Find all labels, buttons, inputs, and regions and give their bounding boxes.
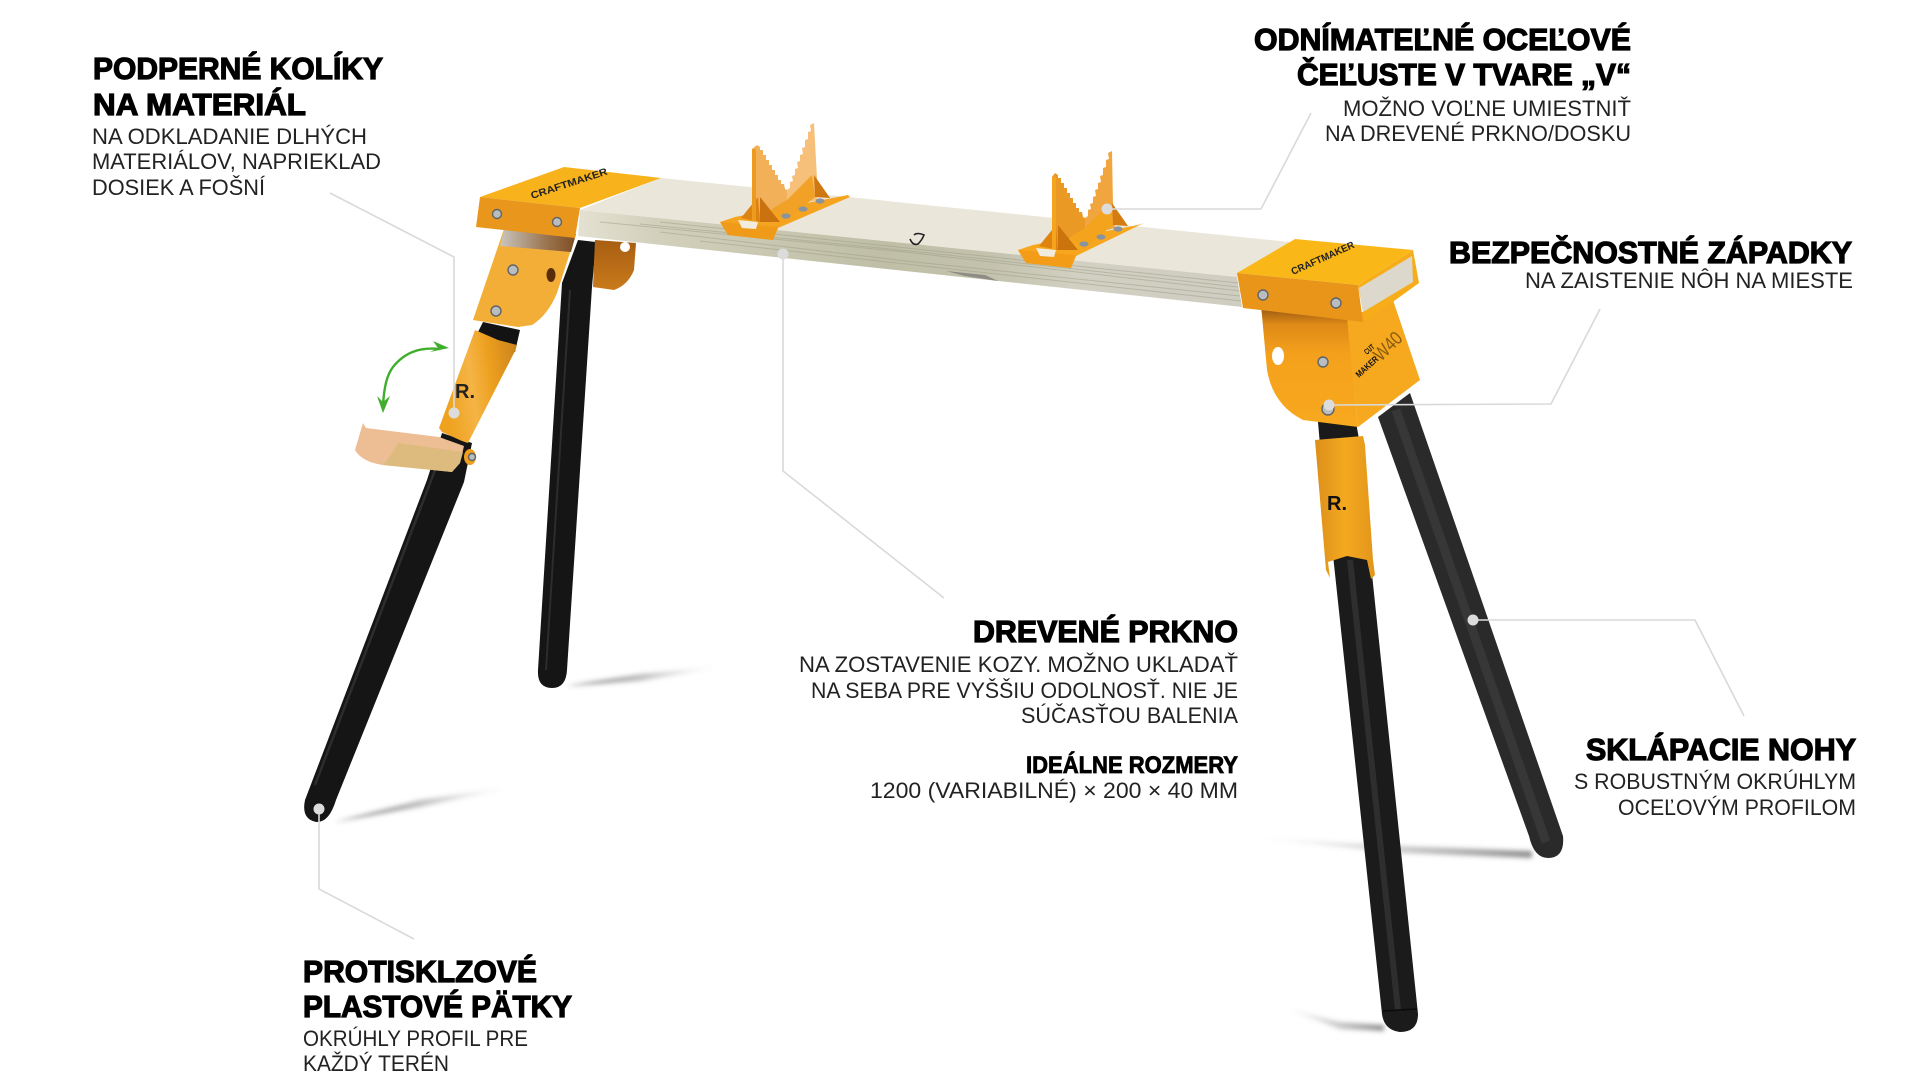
text block: wooden board: SÚČASŤOU BALENIA bbox=[1021, 703, 1238, 728]
text block: folding legs: S ROBUSTNÝM OKRÚHLYM bbox=[1574, 769, 1856, 794]
rear left leg bbox=[538, 240, 596, 688]
text block: steel jaws: MOŽNO VOĽNE UMIESTNIŤ bbox=[1343, 96, 1631, 121]
text block: safety latches: BEZPEČNOSTNÉ ZÁPADKY bbox=[1449, 234, 1852, 270]
text block: wooden board: IDEÁLNE ROZMERY bbox=[1026, 751, 1238, 779]
model label: W40 bbox=[1370, 328, 1407, 366]
text block: anti-slip feet bbox=[303, 954, 572, 1076]
model label: MAKER bbox=[1354, 354, 1381, 379]
text block: anti-slip feet: PLASTOVÉ PÄTKY bbox=[303, 989, 572, 1024]
logo right: CRAFTMAKER bbox=[1290, 240, 1357, 278]
text block: steel jaws: ČEĽUSTE V TVARE „V“ bbox=[1297, 56, 1631, 92]
right bracket bbox=[1261, 300, 1420, 427]
left sleeve: R. bbox=[455, 381, 475, 403]
material rest bbox=[355, 423, 464, 472]
text block: anti-slip feet: PROTISKLZOVÉ bbox=[303, 954, 537, 989]
right sleeve: R. bbox=[1327, 493, 1347, 515]
text block: wooden board bbox=[799, 614, 1238, 803]
text block: support pegs bbox=[92, 51, 383, 200]
V-jaw left bbox=[720, 123, 850, 240]
model label bbox=[1354, 328, 1407, 379]
model label: CUT bbox=[1362, 342, 1377, 356]
text block: folding legs: SKLÁPACIE NOHY bbox=[1586, 732, 1856, 767]
front left leg bbox=[304, 322, 520, 822]
rear right leg bbox=[1378, 393, 1563, 858]
right sleeve bbox=[1315, 436, 1375, 579]
text block: support pegs: NA MATERIÁL bbox=[93, 87, 306, 122]
front right leg bbox=[1318, 422, 1418, 1032]
text block: safety latches: NA ZAISTENIE NÔH NA MIESTE bbox=[1525, 268, 1853, 293]
text block: steel jaws bbox=[1254, 22, 1631, 146]
text block: anti-slip feet: OKRÚHLY PROFIL PRE bbox=[303, 1026, 528, 1051]
green arrow bbox=[377, 341, 449, 413]
text block: support pegs: PODPERNÉ KOLÍKY bbox=[93, 51, 383, 86]
callout line: board bbox=[778, 248, 944, 598]
V-jaw right bbox=[1018, 151, 1144, 268]
left bracket bbox=[473, 226, 576, 327]
text block: wooden board: NA ZOSTAVENIE KOZY. MOŽNO UKLADAŤ bbox=[799, 652, 1238, 677]
wooden board bbox=[578, 178, 1290, 307]
text block: support pegs: DOSIEK A FOŠNÍ bbox=[92, 175, 266, 200]
right end cap bbox=[1237, 239, 1419, 322]
text block: steel jaws: ODNÍMATEĽNÉ OCEĽOVÉ bbox=[1254, 22, 1631, 57]
text block: support pegs: NA ODKLADANIE DLHÝCH bbox=[92, 124, 367, 149]
text block: safety latches bbox=[1449, 234, 1853, 293]
callout line: jaws bbox=[1102, 113, 1311, 214]
text block: wooden board: DREVENÉ PRKNO bbox=[973, 614, 1238, 649]
left end cap bbox=[476, 166, 661, 238]
text block: support pegs: MATERIÁLOV, NAPRIEKLAD bbox=[92, 149, 381, 174]
text block: wooden board: 1200 (VARIABILNÉ) × 200 × 40 MM bbox=[870, 778, 1238, 803]
text block: folding legs: OCEĽOVÝM PROFILOM bbox=[1618, 795, 1856, 820]
callout line: latches bbox=[1324, 309, 1600, 410]
text block: steel jaws: NA DREVENÉ PRKNO/DOSKU bbox=[1325, 121, 1631, 146]
left sleeve bbox=[439, 330, 517, 465]
callout line: support pegs bbox=[330, 193, 460, 418]
text block: folding legs bbox=[1574, 732, 1856, 820]
callout line: feet bbox=[314, 804, 414, 939]
rear left bracket bbox=[593, 240, 636, 290]
floor shadows bbox=[335, 667, 1532, 1031]
text block: wooden board: NA SEBA PRE VYŠŠIU ODOLNOSŤ. NIE JE bbox=[811, 678, 1238, 703]
callout line: legs bbox=[1468, 614, 1744, 716]
text block: anti-slip feet: KAŽDÝ TERÉN bbox=[303, 1051, 449, 1076]
logo left: CRAFTMAKER bbox=[530, 166, 610, 202]
